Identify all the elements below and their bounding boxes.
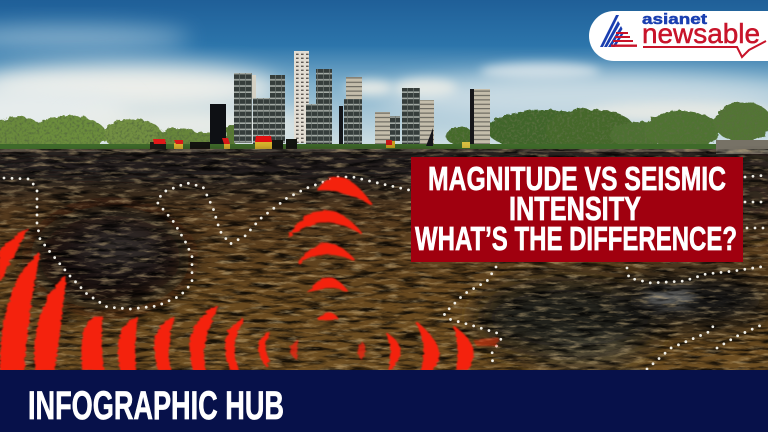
seismic waves [0,178,498,370]
speech-bubble underline [643,41,766,57]
tree line [0,102,768,152]
wave arcs rising to the surface [289,178,371,319]
building: beige pair [375,112,400,144]
dotted fault lines [4,175,768,369]
building: tower H [344,77,362,145]
houses and grass [0,128,768,150]
footer band [0,370,768,432]
building: narrow black [339,106,343,144]
ground surface and soil cross-section [0,140,768,371]
building: tower C [270,75,285,143]
wave arcs spreading right [359,323,498,370]
sky background [0,0,768,152]
building: tower M [470,89,490,146]
wordmark: asianet: asianet [642,11,707,28]
building: tower E [316,69,332,147]
building: white high-rise [294,51,309,143]
wave arcs spreading left [0,229,297,370]
building: tower K [402,88,434,146]
title text: INTENSITY [509,190,641,227]
building: tower B [253,98,270,144]
city skyline [210,51,490,147]
brand logo [589,11,768,61]
building: tower F [306,104,323,147]
wordmark: newsable: newsable [642,18,760,49]
footer heading: INFOGRAPHIC HUB [28,384,284,428]
icon: triangle emblem [600,15,637,47]
title text [415,160,737,257]
building: black block [210,104,226,144]
title panel [411,157,743,262]
building: tower A [234,73,256,143]
